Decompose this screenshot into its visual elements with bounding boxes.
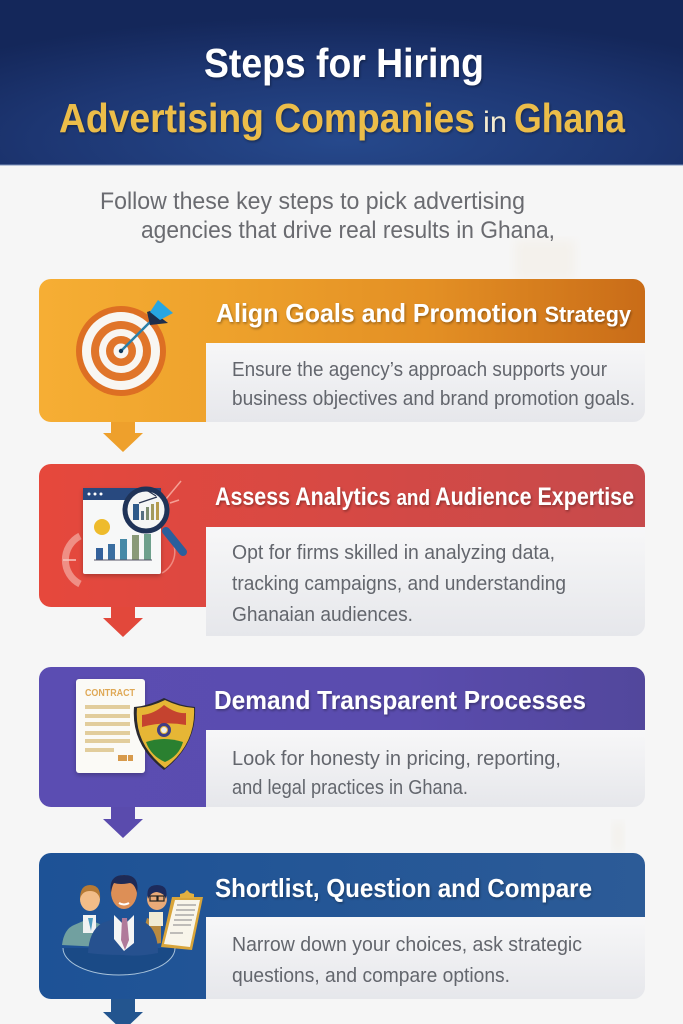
description: business objectives and brand promotion goals. [232, 387, 635, 410]
heading: Assess Analytics and Audience Expertise [215, 483, 634, 511]
description: questions, and compare options. [232, 964, 510, 987]
description [232, 933, 582, 987]
intro text: agencies that drive real results in Ghana, [141, 217, 555, 244]
heading: Align Goals and Promotion Strategy [216, 298, 631, 328]
icon: contract and shield [76, 679, 195, 773]
description: Ghanaian audiences. [232, 603, 413, 626]
intro text [100, 188, 555, 244]
icon: analytics window with magnifier [63, 481, 183, 584]
heading: Shortlist, Question and Compare [215, 873, 592, 903]
panel: step 3 transparent processes [39, 667, 645, 838]
icon: team with clipboard [62, 875, 203, 975]
description [232, 358, 635, 410]
description [232, 541, 566, 626]
description: Opt for firms skilled in analyzing data, [232, 541, 555, 564]
description: tracking campaigns, and understanding [232, 572, 566, 595]
panel: step 1 align goals [39, 279, 645, 452]
icon: contract and shield: CONTRACT [85, 688, 135, 699]
panel: step 4 shortlist [39, 853, 645, 1024]
intro text: Follow these key steps to pick advertising [100, 188, 525, 215]
description: and legal practices in Ghana. [232, 776, 468, 799]
description [232, 747, 561, 799]
description: Ensure the agency’s approach supports your [232, 358, 607, 381]
description: Narrow down your choices, ask strategic [232, 933, 582, 956]
title banner [0, 0, 683, 166]
heading: Demand Transparent Processes [214, 685, 586, 715]
title line 2: Advertising Companies [59, 95, 475, 141]
title line 2: in [483, 106, 507, 139]
panel: step 2 assess analytics [39, 464, 645, 637]
description: Look for honesty in pricing, reporting, [232, 747, 561, 770]
icon: target with dart [76, 300, 173, 396]
title line 1: Steps for Hiring [204, 40, 484, 86]
title line 2: Ghana [514, 95, 626, 141]
